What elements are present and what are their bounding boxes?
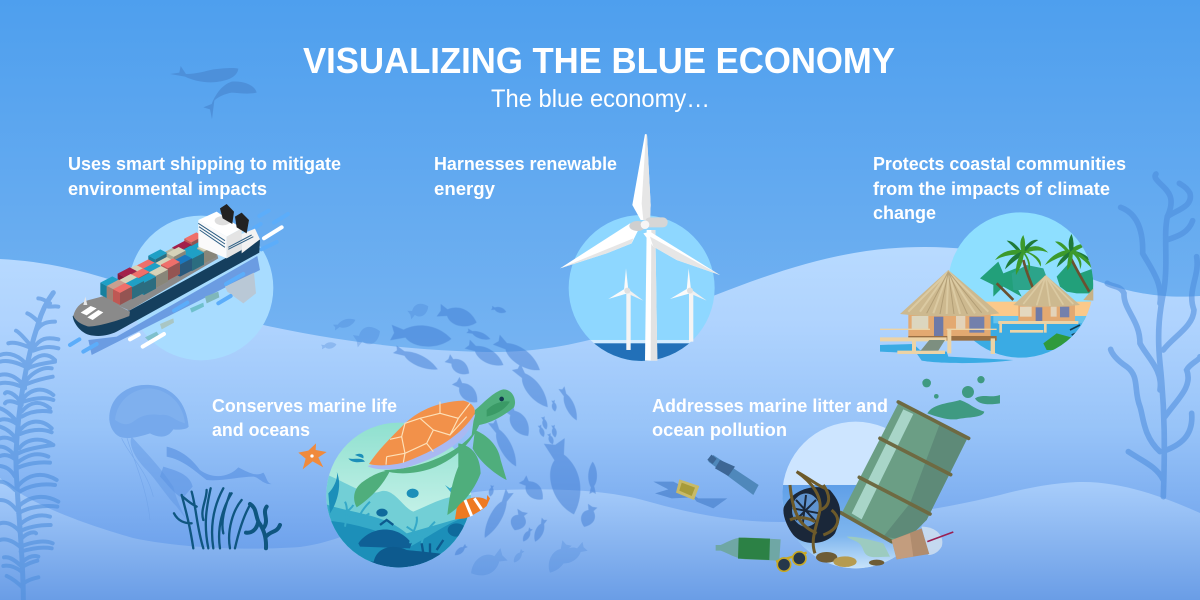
turtle shell <box>369 401 475 465</box>
faded upper fish <box>321 300 431 350</box>
subtitle: The blue economy… <box>491 85 710 113</box>
plastic film <box>847 537 890 557</box>
bag and can <box>653 479 727 508</box>
superstructure <box>198 204 260 258</box>
palm right <box>1045 234 1092 270</box>
takeaway cup <box>892 527 953 559</box>
green bottle <box>716 537 781 561</box>
clownfish <box>455 495 490 519</box>
left kelp <box>0 293 58 599</box>
back hut <box>998 275 1093 333</box>
seaweed on tire <box>790 472 838 553</box>
deck <box>73 297 130 327</box>
jellyfish <box>109 385 272 520</box>
coastal resort icon <box>880 212 1097 363</box>
reef scene <box>326 454 471 568</box>
palm left <box>995 235 1048 275</box>
small turbine right <box>670 268 707 342</box>
ship text: Uses smart shipping to mitigate <box>68 154 341 174</box>
hull <box>73 239 260 336</box>
litter circle <box>782 422 929 568</box>
resort circle <box>948 212 1093 358</box>
oil splash <box>922 376 1000 419</box>
front hut <box>880 270 999 354</box>
ship reflection <box>88 256 260 355</box>
sea <box>590 340 691 361</box>
whales silhouettes <box>170 66 257 119</box>
right kelp <box>1107 174 1200 497</box>
wind text <box>434 154 617 199</box>
barrel <box>841 402 969 542</box>
rocks <box>816 552 884 567</box>
marine litter icon group <box>653 376 1000 571</box>
conservation text: and oceans <box>212 420 310 440</box>
shell underside <box>368 414 475 469</box>
ship text <box>68 154 341 199</box>
fish school <box>321 300 599 582</box>
ship icon group <box>70 204 288 360</box>
plastic bottle floating <box>707 455 759 495</box>
sunglasses <box>776 552 807 571</box>
litter text: ocean pollution <box>652 420 787 440</box>
speed lines <box>70 211 288 352</box>
scene clipped to circle <box>974 234 1094 358</box>
resort text: from the impacts of climate <box>873 179 1110 199</box>
main fish <box>390 302 599 557</box>
rear flipper <box>354 471 390 507</box>
containers <box>100 232 216 305</box>
wind text: energy <box>434 179 495 199</box>
wind energy icon <box>560 134 720 363</box>
body and neck <box>383 389 515 473</box>
resort text: Protects coastal communities <box>873 154 1126 174</box>
back flipper <box>473 430 507 480</box>
litter text <box>652 396 888 440</box>
small turbine left <box>608 268 643 350</box>
water spill <box>880 344 1013 363</box>
wind text: Harnesses renewable <box>434 154 617 174</box>
conservation text <box>212 396 397 440</box>
ship backdrop circle <box>129 216 273 360</box>
title: VISUALIZING THE BLUE ECONOMY <box>303 40 895 81</box>
large turbine <box>560 134 720 361</box>
reef circle <box>326 423 471 567</box>
conservation text: Conserves marine life <box>212 396 397 416</box>
ship text: environmental impacts <box>68 179 267 199</box>
litter text: Addresses marine litter and <box>652 396 888 416</box>
front flipper <box>447 443 481 515</box>
resort text <box>873 154 1126 223</box>
resort text: change <box>873 203 936 223</box>
coral <box>174 488 280 548</box>
faded lower fish <box>466 539 588 582</box>
turtle icon group <box>323 389 515 570</box>
wind circle <box>569 215 715 361</box>
tire <box>783 487 840 543</box>
starfish <box>298 443 327 469</box>
